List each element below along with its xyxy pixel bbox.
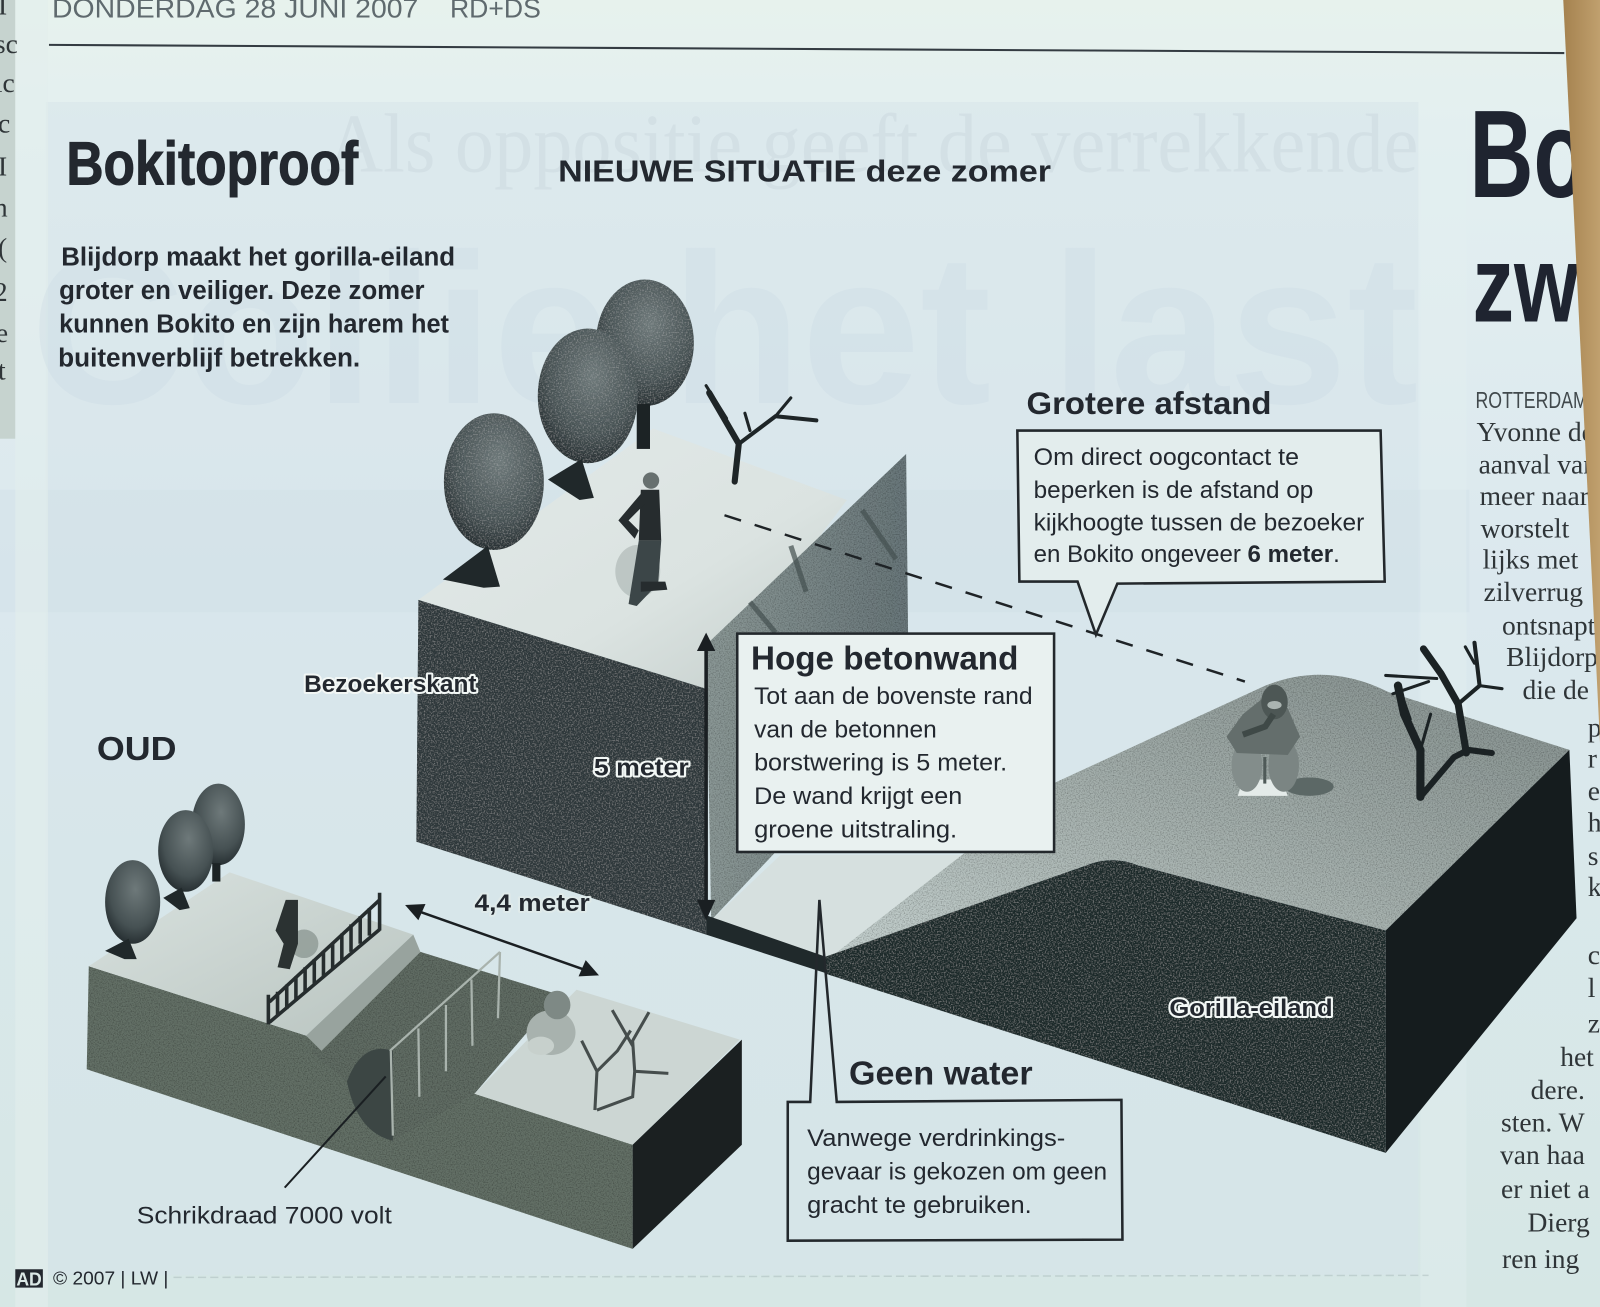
next article body text: dere. [1531,1074,1585,1105]
base strip in front of the wall [706,915,847,973]
icon: electric fence [390,952,500,1136]
island top surface [835,675,1569,954]
callout: hoge betonwand [737,634,1054,852]
intro text: buitenverblijf betrekken. [58,344,360,372]
label: schrikdraad 7000 volt: Schrikdraad 7000 volt [137,1202,392,1229]
next article body text: Dierg [1528,1206,1590,1237]
icon: three large trees [443,280,694,588]
heading: oud: OUD [97,731,177,768]
next article body text: e [1588,775,1600,806]
table edge behind the page [1563,0,1600,743]
next article body text: van haa [1500,1139,1585,1170]
height arrow 5 meter [697,633,715,920]
heading: grotere afstand: Grotere afstand [1027,385,1271,421]
icon: old trees [105,784,245,959]
visitor platform front face [416,600,706,935]
old ditch hole [347,1049,393,1141]
visitor platform top [418,429,847,689]
callout: hoge betonwand: Tot aan de bovenste rand [754,683,1033,710]
icon: gorilla on island [1227,685,1334,796]
next article body text: Blijdorp [1506,641,1598,672]
callout: grotere afstand: kijkhoogte tussen de bezoeker [1034,510,1364,537]
icon: old wooden fence [268,893,380,1024]
dashed sight line [724,515,1245,682]
callout: hoge betonwand: borstwering is 5 meter. [754,749,1007,776]
next article body text: worstelt [1481,513,1570,544]
next article body text [1476,387,1600,1274]
old ditch floor [311,952,559,1141]
next article body text: het [1560,1041,1594,1072]
callout: hoge betonwand: van de betonnen [754,717,937,744]
AD logo: AD [16,1269,42,1290]
callout: hoge betonwand: groene uitstraling. [754,817,957,844]
arrow: 4,4 meter [405,904,599,976]
callout: grotere afstand: beperken is de afstand op [1034,477,1313,504]
next article body text: zilverrug [1484,576,1583,607]
label: bezoekerskant: Bezoekerskant [304,671,477,698]
island front face [824,860,1386,1153]
callout: geen water [788,900,1122,1241]
intro text: kunnen Bokito en zijn harem het [59,311,449,339]
old visitor top [89,872,413,1036]
heading: geen water: Geen water [849,1056,1033,1093]
left column text fragments [0,0,18,386]
paper background: Als oppositie geeft de verrekkende [327,97,1418,190]
callout: grotere afstand: Om direct oogcontact te [1034,444,1299,471]
next article body text: ontsnapt [1502,610,1596,641]
label: gorilla-eiland: Gorilla-eiland [1169,995,1333,1022]
label: 5 meter: 5 meter [594,754,689,781]
old situation block [87,872,742,1249]
label: 4,4 meter: 4,4 meter [474,890,590,917]
next article body text: c [1588,939,1600,970]
next article body text: sten. W [1501,1107,1585,1138]
next article headline [1469,85,1588,344]
callout: geen water: gevaar is gekozen om geen [807,1158,1107,1185]
leader line to electric fence [285,1076,386,1188]
next article body text: meer naar [1480,480,1589,511]
title: Bokitoproof [66,130,359,198]
next article body text: ren ing [1502,1243,1579,1274]
new situation block: visitor side and gorilla island [416,429,1577,1153]
intro text: Blijdorp maakt het gorilla-eiland [61,243,455,271]
old side face [633,1040,742,1249]
next article body text: Yvonne de [1477,416,1594,447]
callout: geen water: gracht te gebruiken. [807,1192,1032,1219]
callout: grotere afstand: en Bokito ongeveer 6 meter. [1034,541,1340,568]
concrete wall face [706,454,1020,920]
subtitle: new situation: NIEUWE SITUATIE deze zomer [558,155,1051,189]
intro text: groter en veiliger. Deze zomer [59,277,425,305]
old island top [474,990,740,1145]
credit: © 2007 | LW | [53,1268,168,1289]
icon: bare tree on visitor platform [706,386,816,482]
icon: old visitor figure [276,900,318,969]
old front face [87,966,633,1249]
paper background: Collie het last [31,210,1418,449]
next article body text: z [1588,1008,1600,1039]
callout: geen water: Vanwege verdrinkings- [807,1125,1065,1152]
icon: old gorilla [527,991,576,1055]
next article body text: lijks met [1483,543,1579,574]
callout: hoge betonwand: De wand krijgt een [754,783,962,810]
branch silhouettes on wall [750,510,896,633]
next article body text: aanval van [1479,448,1597,479]
callout: hoge betonwand: Hoge betonwand [751,640,1018,677]
island side face [1386,750,1577,1153]
next article body text: r [1588,742,1597,773]
old ramp [306,935,420,1051]
next article body text: s [1588,840,1598,871]
next article body text: l [1588,972,1596,1003]
next article body text: er niet a [1501,1173,1590,1204]
icon: visitor figure [615,472,667,606]
icon: old bare tree [582,1010,668,1110]
callout: grotere afstand [1017,431,1385,635]
base floor [711,855,1055,957]
next article body text: die de [1522,674,1589,705]
intro text [58,243,455,372]
icon: bare tree on island [1386,643,1502,797]
